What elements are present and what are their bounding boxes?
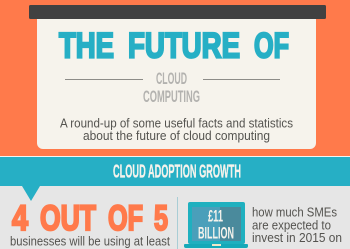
title: THE xyxy=(59,26,114,66)
panel: title card xyxy=(37,18,316,149)
white rule xyxy=(0,156,350,157)
title: FUTURE xyxy=(128,26,240,66)
description: about the future of cloud computing xyxy=(83,128,270,143)
stat description: SME investment: how much SMEs xyxy=(252,204,337,220)
banner pointer xyxy=(22,186,40,201)
icon: laptop with £11 billion xyxy=(184,202,248,248)
header bar xyxy=(29,5,326,19)
laptop amount: £11 xyxy=(208,206,223,226)
subtitle: computing: COMPUTING xyxy=(143,87,200,106)
stat: 4 out of 5: OUT xyxy=(40,199,96,238)
description: A round-up of some useful facts and statistics xyxy=(60,116,293,130)
stat description: SME investment xyxy=(252,204,342,245)
stat: 4 out of 5: 5 xyxy=(154,199,168,238)
header background xyxy=(0,0,350,156)
stat description: businesses will be using at least xyxy=(10,234,170,248)
title xyxy=(59,26,289,66)
stat description: SME investment: are expected to xyxy=(252,218,331,232)
stat: 4 out of 5: OF xyxy=(108,199,143,238)
laptop unit: BILLION xyxy=(198,224,234,242)
stat description: SME investment: invest in 2015 on xyxy=(252,230,342,245)
description xyxy=(60,116,293,143)
title: OF xyxy=(254,26,289,66)
section banner xyxy=(0,157,350,201)
stat: 4 out of 5 xyxy=(10,199,170,248)
subtitle: cloud: CLOUD xyxy=(156,69,187,88)
stat: 4 out of 5: 4 xyxy=(12,199,28,238)
